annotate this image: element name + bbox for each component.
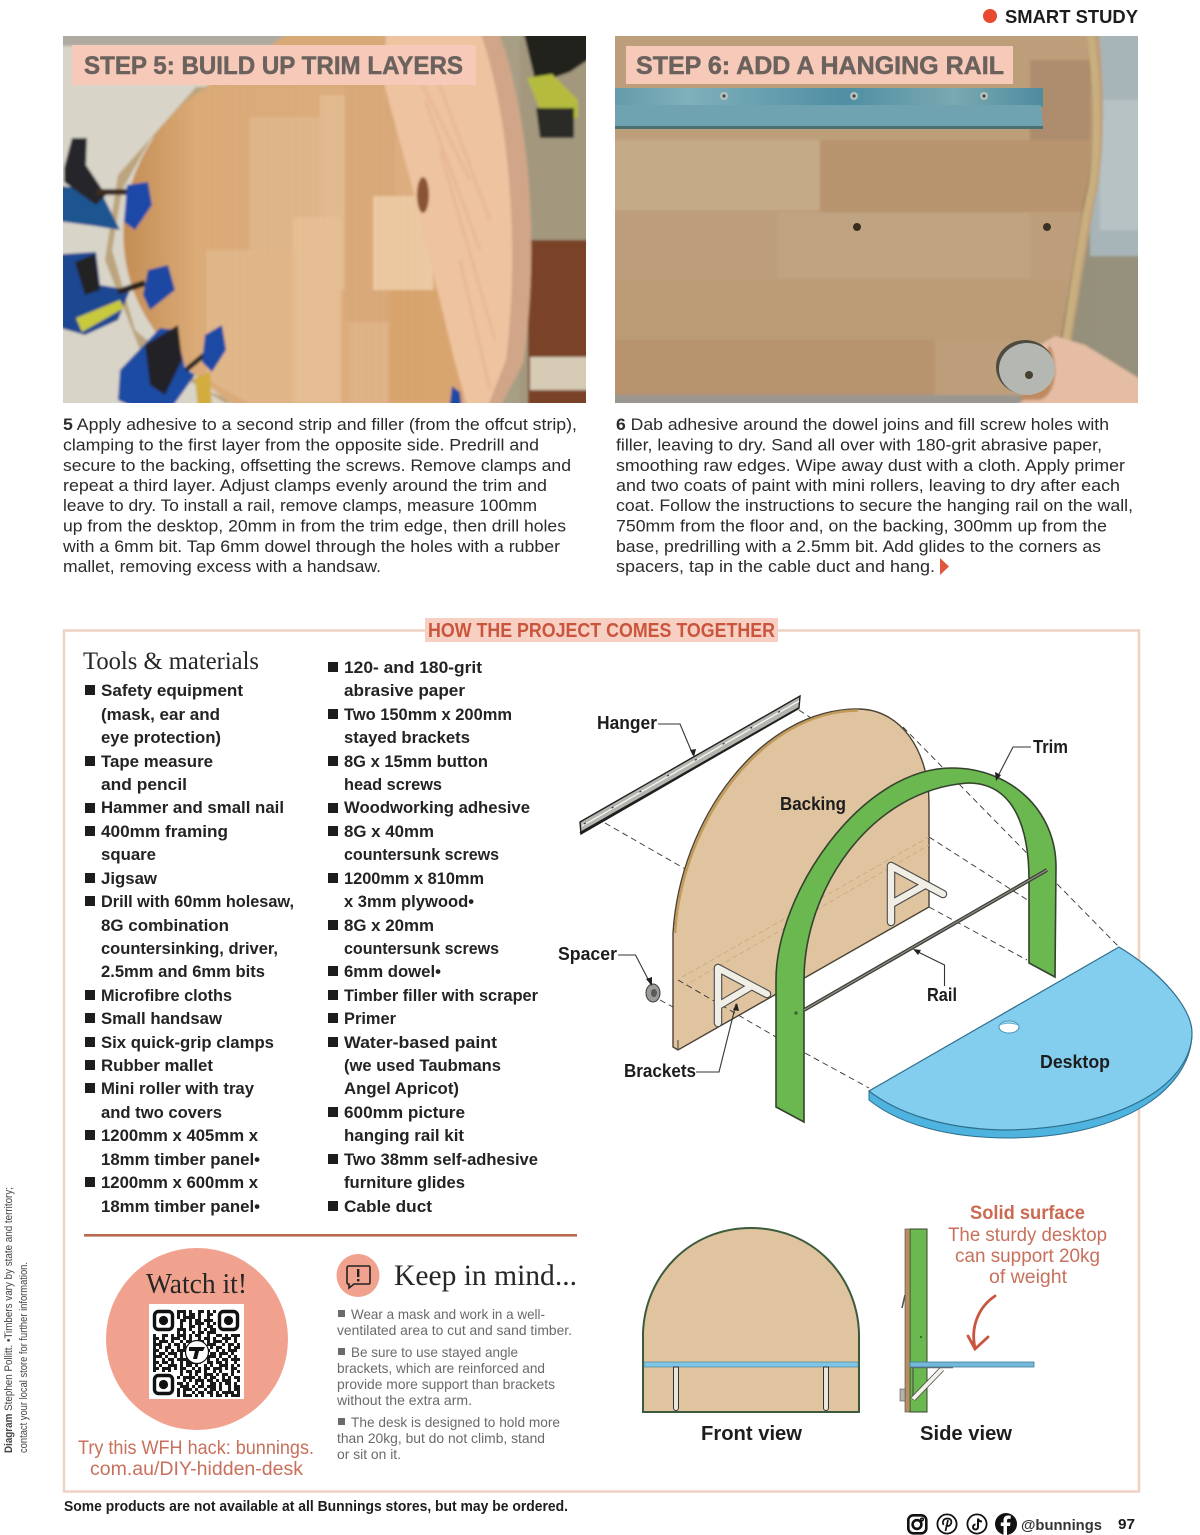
callout: keep in mind: The desk is designed to hold more <box>351 1414 560 1430</box>
panel: step 5 photo <box>63 36 586 403</box>
text block: step 6 instructions: spacers, tap in the cable duct and hang. <box>616 557 935 576</box>
callout: watch it QR: Watch it! <box>146 1269 247 1300</box>
callout: watch it QR: Try this WFH hack: bunnings. <box>78 1438 314 1459</box>
list: tools and materials, left column: 400mm framing <box>101 822 228 841</box>
text block: step 6 instructions: base, predrilling with a 2.5mm bit. Add glides to the corners as <box>616 537 1101 556</box>
text block: step 5 instructions: mallet, removing excess with a handsaw. <box>63 557 381 576</box>
label: spacer: Spacer <box>558 944 617 964</box>
list: tools and materials, left column: (mask, ear and <box>101 705 220 724</box>
part: desktop: Desktop <box>1040 1052 1110 1072</box>
list: tools and materials, left column: Mini roller with tray <box>101 1079 255 1098</box>
callout: keep in mind: Be sure to use stayed angle <box>351 1344 518 1360</box>
callout: watch it QR: com.au/DIY-hidden-desk <box>90 1459 304 1480</box>
list: tools and materials, left column: countersinking, driver, <box>101 939 278 958</box>
list: tools and materials, right column: countersunk screws <box>344 845 499 864</box>
sidebar credit: Diagram Stephen Pollitt. •Timbers vary by state and territory; <box>3 1187 15 1453</box>
list: tools and materials, right column: Angel Apricot) <box>344 1079 459 1098</box>
diagram: front view: Front view <box>701 1423 802 1445</box>
callout: solid surface: of weight <box>989 1267 1068 1288</box>
list: tools and materials, left column: Small handsaw <box>101 1009 223 1028</box>
callout: keep in mind: without the extra arm. <box>336 1392 472 1408</box>
label: brackets <box>624 1003 739 1081</box>
heading: step 5 tag: STEP 5: BUILD UP TRIM LAYERS <box>84 52 463 80</box>
callout: keep in mind: brackets, which are reinforced and <box>337 1360 545 1376</box>
panel: step 6 photo <box>615 36 1138 403</box>
list: tools and materials, left column: 2.5mm and 6mm bits <box>101 962 265 981</box>
icon: tiktok <box>967 1514 987 1534</box>
label: brackets: Brackets <box>624 1061 696 1081</box>
list: tools and materials, right column: Woodworking adhesive <box>344 798 530 817</box>
footer: social icons <box>908 1513 1102 1535</box>
callout: watch it QR <box>78 1248 314 1480</box>
list: tools and materials, left column: Microfibre cloths <box>101 986 232 1005</box>
list: tools and materials, right column: Two 150mm x 200mm <box>344 705 512 724</box>
text block: step 5 instructions: up from the desktop, 20mm in from the trim edge, then drill holes <box>63 516 566 536</box>
text block: step 5 instructions: secure to the backing, offsetting the screws. Remove clamps and <box>63 456 571 475</box>
heading: tools and materials: Tools & materials <box>83 648 259 675</box>
list: tools and materials, left column: eye protection) <box>101 728 221 747</box>
callout: keep in mind: ventilated area to cut and sand timber. <box>337 1322 572 1338</box>
part: brackets <box>718 866 943 1023</box>
part: trim <box>776 768 1056 1122</box>
label: hanger <box>597 713 696 757</box>
list: tools and materials, left column: Rubber mallet <box>101 1056 213 1075</box>
sidebar credit: contact your local store for further information. <box>18 1262 30 1453</box>
callout: solid surface: Solid surface <box>970 1203 1085 1224</box>
callout: keep in mind: than 20kg, but do not climb, stand <box>337 1430 545 1446</box>
list: tools and materials, right column: Water-based paint <box>344 1033 497 1052</box>
part: hanger <box>580 696 800 834</box>
label: spacer <box>558 944 652 986</box>
list: tools and materials, right column: 8G x 20mm <box>344 916 434 935</box>
footnote: availability: Some products are not available at all Bunnings stores, but may be ordered. <box>64 1498 568 1515</box>
list: tools and materials, right column: abrasive paper <box>344 681 465 700</box>
diagram: side view <box>900 1229 1034 1445</box>
list: tools and materials, left column: 1200mm x 600mm x <box>101 1173 259 1192</box>
list: tools and materials, right column: Two 38mm self-adhesive <box>344 1150 538 1169</box>
page number: 97 <box>1118 1516 1135 1533</box>
list: tools and materials, left column: Six quick-grip clamps <box>101 1033 274 1052</box>
list: tools and materials, right column: 8G x 40mm <box>344 822 434 841</box>
list: tools and materials, right column: 8G x 15mm button <box>344 752 488 771</box>
callout: keep in mind: Wear a mask and work in a well- <box>351 1306 545 1322</box>
text block: step 6 instructions: 6 Dab adhesive around the dowel joins and fill screw holes with <box>616 415 1109 434</box>
part: backing <box>673 709 929 1050</box>
text block: step 6 instructions: and two coats of paint with mini rollers, leaving to dry after each <box>616 476 1120 495</box>
list: tools and materials, right column: Timber filler with scraper <box>344 986 538 1005</box>
label: trim <box>995 737 1068 781</box>
heading: step 5 tag <box>72 45 476 85</box>
list: tools and materials, left column: 1200mm x 405mm x <box>101 1126 259 1145</box>
list: tools and materials, right column: furniture glides <box>344 1173 465 1192</box>
part: desktop <box>869 947 1192 1138</box>
callout: keep in mind: Keep in mind... <box>394 1259 577 1292</box>
part: rail <box>804 870 1047 1010</box>
section tag: smart study: SMART STUDY <box>1005 7 1138 27</box>
list: tools and materials, right column: (we used Taubmans <box>344 1056 501 1075</box>
text block: step 6 instructions: filler, leaving to dry. Sand all over with 180-grit abrasive paper, <box>616 436 1102 454</box>
callout: solid surface: can support 20kg <box>955 1246 1100 1267</box>
list: tools and materials, left column: 8G combination <box>101 916 229 935</box>
list: tools and materials, right column: Cable duct <box>344 1197 432 1216</box>
part: backing: Backing <box>780 794 846 814</box>
list: tools and materials, left column: Safety equipment <box>101 681 243 700</box>
icon: speech bubble alert <box>336 1254 380 1297</box>
text block: step 6 instructions <box>616 415 1133 576</box>
list: tools and materials, left column: Hammer and small nail <box>101 798 284 817</box>
callout: solid surface: The sturdy desktop <box>948 1225 1107 1246</box>
text block: step 5 instructions: leave to dry. To install a rail, remove clamps, measure 100mm <box>63 496 537 515</box>
footer: social icons: @bunnings <box>1021 1517 1102 1534</box>
list: tools and materials, right column: stayed brackets <box>344 728 470 747</box>
diagram: side view: Side view <box>920 1423 1012 1445</box>
heading: how the project comes together: HOW THE PROJECT COMES TOGETHER <box>428 620 775 642</box>
icon: instagram <box>908 1515 926 1533</box>
panel: project frame <box>64 630 1139 1492</box>
text block: step 5 instructions: clamping to the first layer from the opposite side. Predrill and <box>63 436 539 454</box>
list: tools and materials, right column: Primer <box>344 1009 396 1028</box>
list: tools and materials, left column: Drill with 60mm holesaw, <box>101 892 294 911</box>
label: hanger: Hanger <box>597 713 657 733</box>
list: tools and materials, right column <box>328 658 538 1216</box>
text block: step 5 instructions: with a 6mm bit. Tap 6mm dowel through the holes with a rubber <box>62 537 560 556</box>
list: tools and materials, right column: x 3mm plywood• <box>344 892 474 911</box>
callout: keep in mind: or sit on it. <box>337 1446 401 1462</box>
list: tools and materials, right column: 600mm picture <box>344 1103 465 1122</box>
list: tools and materials, right column: countersunk screws <box>344 939 499 958</box>
list: tools and materials, left column: square <box>101 845 156 864</box>
QR code <box>151 1308 242 1398</box>
icon: pinterest <box>937 1514 957 1534</box>
label: trim: Trim <box>1033 737 1068 757</box>
text block: step 6 instructions: 750mm from the floor and, on the backing, 300mm up from the <box>616 516 1107 536</box>
list: tools and materials, right column: 1200mm x 810mm <box>344 869 484 888</box>
diagram: front view <box>643 1228 859 1445</box>
icon: facebook <box>995 1513 1017 1535</box>
part: spacer <box>646 984 660 1002</box>
diagram: exploded view <box>558 696 1192 1138</box>
list: tools and materials, left column: and two covers <box>101 1103 222 1122</box>
list: tools and materials, left column: Jigsaw <box>101 869 158 888</box>
text block: step 5 instructions: 5 Apply adhesive to a second strip and filler (from the offcut strip), <box>63 415 577 434</box>
callout: keep in mind: provide more support than brackets <box>337 1376 555 1392</box>
sidebar credit <box>3 1187 30 1453</box>
list: tools and materials, left column: 18mm timber panel• <box>101 1197 260 1216</box>
list: tools and materials, right column: 6mm dowel• <box>344 962 441 981</box>
text block: step 5 instructions <box>62 415 577 576</box>
label: rail: Rail <box>927 985 957 1005</box>
list: tools and materials, left column: Tape measure <box>101 752 213 771</box>
callout: keep in mind <box>336 1254 577 1462</box>
heading: step 6 tag: STEP 6: ADD A HANGING RAIL <box>636 52 1004 80</box>
list: tools and materials, left column: 18mm timber panel• <box>101 1150 260 1169</box>
text block: step 6 instructions: smoothing raw edges. Wipe away dust with a cloth. Apply primer <box>616 456 1125 475</box>
list: tools and materials, left column <box>85 681 294 1216</box>
list: tools and materials, right column: hanging rail kit <box>344 1126 464 1145</box>
text block: step 5 instructions: repeat a third layer. Adjust clamps evenly around the trim and <box>63 476 547 495</box>
list: tools and materials, right column: 120- and 180-grit <box>344 658 482 677</box>
list: tools and materials, left column: and pencil <box>101 775 187 794</box>
label: rail <box>913 949 957 1005</box>
heading: step 6 tag <box>626 46 1013 84</box>
callout: solid surface <box>948 1203 1107 1288</box>
list: tools and materials, right column: head screws <box>344 775 442 794</box>
arrow: solid surface <box>968 1296 995 1349</box>
text block: step 6 instructions: coat. Follow the instructions to secure the hanging rail on the wall, <box>616 496 1133 515</box>
